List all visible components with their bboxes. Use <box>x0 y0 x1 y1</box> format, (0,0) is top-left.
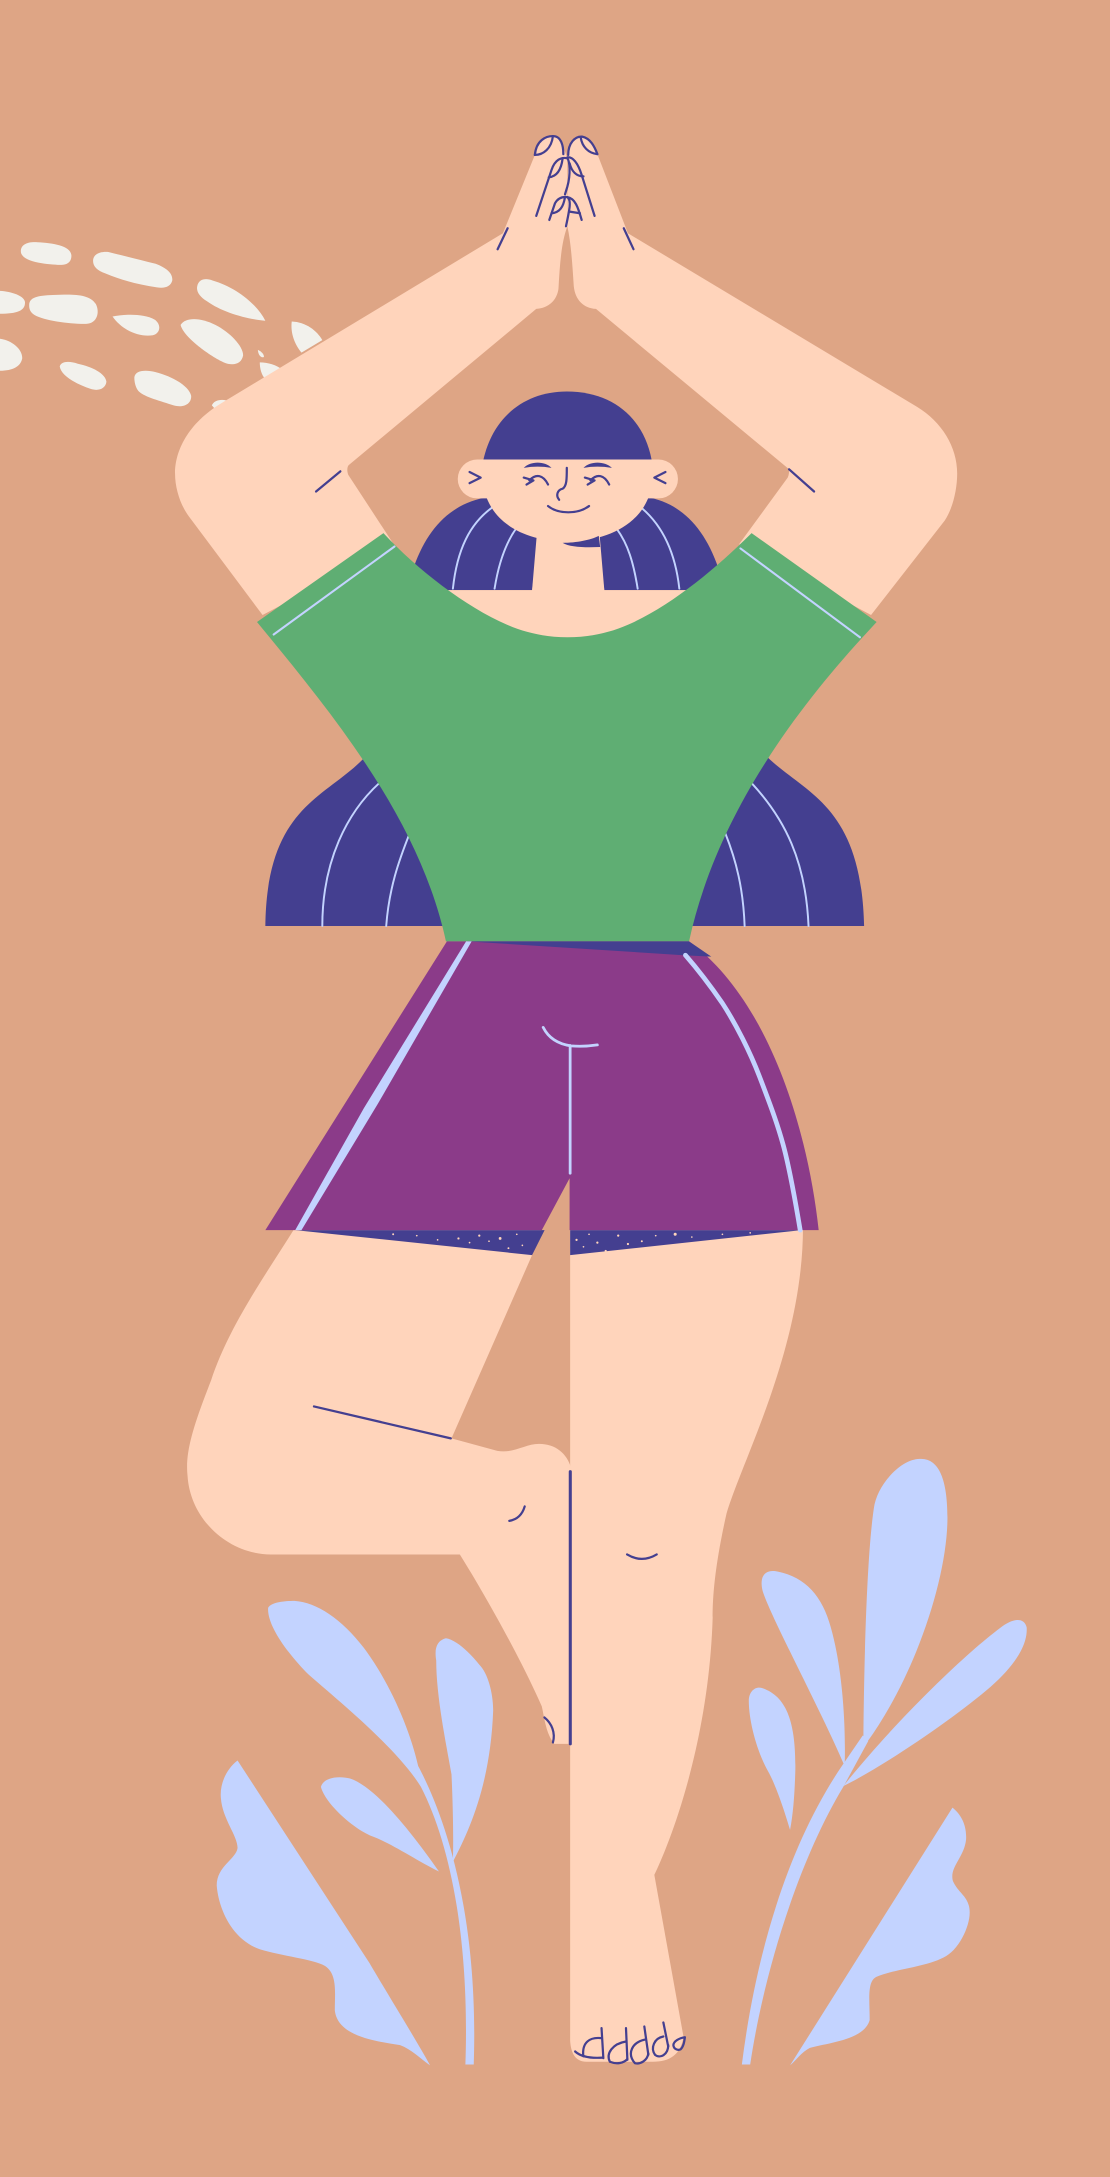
large top leaf and stem <box>268 1601 474 2065</box>
side leaf <box>843 1620 1027 1786</box>
shorts waistband shadow <box>467 941 711 957</box>
arm: left raised arm and hand <box>175 136 567 615</box>
facial features <box>470 463 665 512</box>
tall leaf <box>849 1459 947 1773</box>
neck and chest <box>417 525 722 653</box>
leg details <box>314 1406 657 1744</box>
arm: right raised arm and hand <box>567 137 957 615</box>
hair fringe <box>483 392 652 460</box>
finger outlines <box>316 136 814 491</box>
right leaf <box>436 1638 493 1862</box>
middle leaf <box>762 1571 845 1766</box>
bent leg <box>187 1227 571 1744</box>
ears <box>458 460 678 498</box>
plant: left <box>217 1601 493 2065</box>
standing leg <box>570 1227 803 2062</box>
toes <box>575 2022 685 2063</box>
centre seam <box>543 1027 597 1046</box>
shorts hem underside <box>295 1230 802 1255</box>
big lobed leaf <box>790 1808 970 2065</box>
plant: right <box>742 1459 1027 2065</box>
big lobed leaf <box>217 1760 430 2065</box>
upper hair shoulders <box>414 497 718 590</box>
lower long hair <box>265 757 864 926</box>
neck shadow <box>563 536 600 547</box>
right side stripe <box>685 955 800 1230</box>
small leaf <box>749 1688 795 1830</box>
stem <box>742 1735 868 2065</box>
purple shorts <box>265 941 819 1230</box>
back of the shirt sleeves <box>288 520 847 600</box>
left side stripe <box>295 941 472 1230</box>
green t-shirt <box>257 533 877 941</box>
small inner leaf <box>321 1777 439 1872</box>
face <box>483 460 652 541</box>
pebbles drifting behind the arm <box>0 242 322 411</box>
head <box>458 392 678 547</box>
